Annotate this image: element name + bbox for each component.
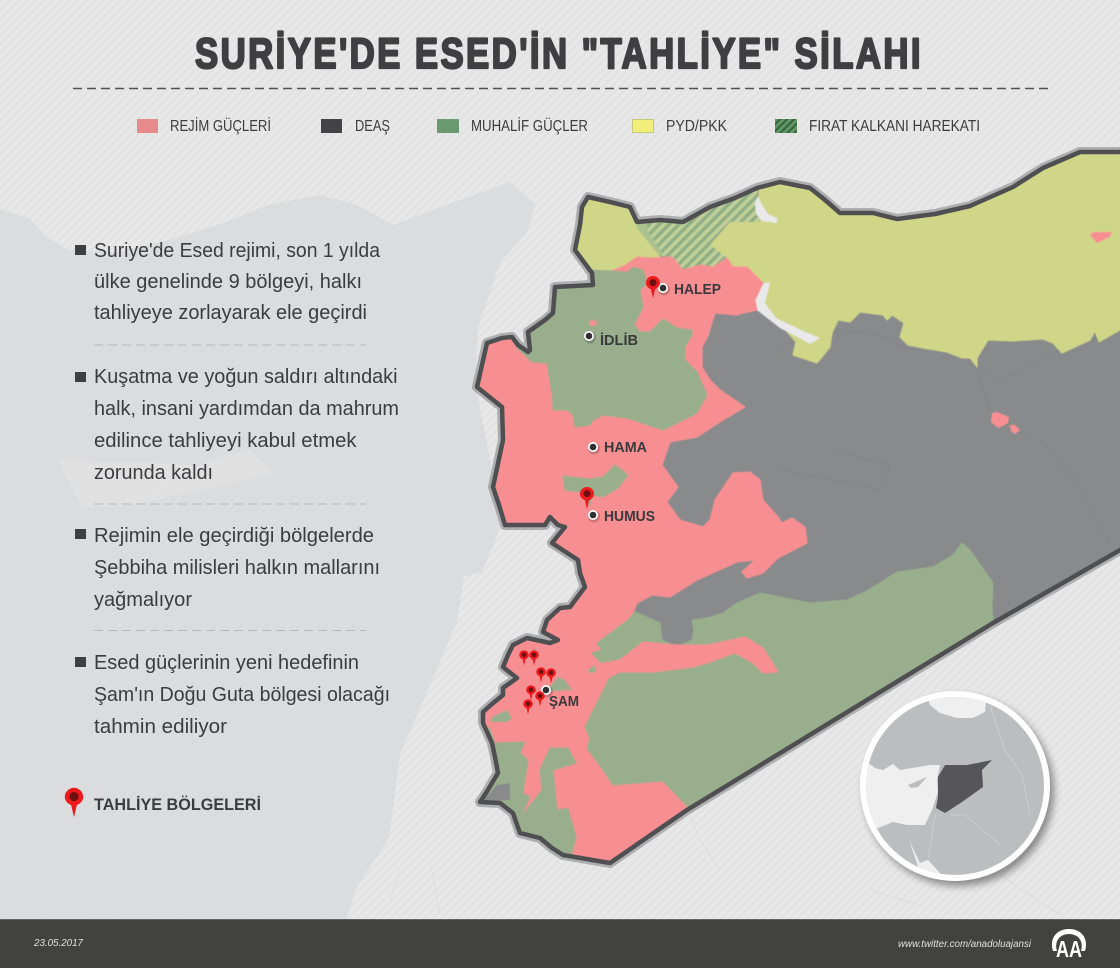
bullet point 2: zorunda kaldı: [94, 462, 213, 484]
inset: Cyprus: [908, 777, 927, 788]
pin legend: tahliye bölgeleri: TAHLİYE BÖLGELERİ: [94, 795, 261, 814]
source url: www.twitter.com/anadoluajansi: [898, 938, 1032, 950]
border outline: [477, 152, 1120, 863]
inset: Black Sea: [928, 697, 986, 718]
bullet point 1: [75, 240, 381, 324]
evacuation pins: [519, 276, 660, 715]
territory: muhalif İdlib: [500, 267, 707, 430]
bullet point 4: Şam'ın Doğu Guta bölgesi olacağı: [94, 684, 390, 706]
icon: AA logo: AA: [1056, 936, 1082, 962]
legend item: muhalif güçler: [437, 116, 588, 135]
bullet point 1: tahliyeye zorlayarak ele geçirdi: [94, 302, 367, 324]
background map silhouette: [0, 182, 1060, 920]
city: İdlib: İDLİB: [600, 332, 638, 349]
bullet point 2: [75, 366, 399, 484]
legend: [137, 116, 980, 135]
icon: AA logo: [1052, 929, 1086, 962]
territory: DEAŞ: [634, 190, 1120, 645]
bullet point 4: tahmin ediliyor: [94, 716, 227, 738]
bullet point 3: Şebbiha milisleri halkın mallarını: [94, 557, 380, 579]
territory: Fırat Kalkanı: [646, 190, 760, 270]
footer bar: [0, 919, 1120, 968]
inset: Red Sea: [909, 840, 940, 874]
legend item: PYD/PKK: PYD/PKK: [666, 118, 727, 135]
legend item: DEAŞ: [321, 118, 390, 135]
legend item: rejim güçleri: [137, 116, 271, 135]
date: 23.05.2017: [33, 937, 84, 949]
legend item: rejim güçleri: REJİM GÜÇLERİ: [170, 116, 271, 135]
territory: muhalif south: [585, 543, 1000, 830]
map of Syria: [470, 140, 1120, 880]
territory: muhalif Humus: [563, 465, 628, 505]
territory: rejim strip: [590, 637, 778, 678]
city: Humus: HUMUS: [604, 509, 655, 525]
bullet point 4: [75, 652, 390, 738]
legend item: fırat kalkanı harekatı: FIRAT KALKANI HAREKATI: [809, 118, 980, 135]
locator inset map: [850, 690, 1054, 886]
territory: rejim main: [470, 257, 807, 880]
legend item: PYD/PKK: [632, 118, 727, 135]
city: Şam: ŞAM: [549, 694, 579, 710]
bullet point 1: ülke genelinde 9 bölgeyi, halkı: [94, 271, 362, 293]
bullet point 2: edilince tahliyeyi kabul etmek: [94, 430, 358, 452]
city: Hama: HAMA: [604, 440, 648, 456]
city: Şam: [541, 685, 579, 710]
pin legend: tahliye bölgeleri: [65, 788, 261, 817]
inset: Syria: [936, 760, 992, 813]
title: SURİYE'DE ESED'İN "TAHLİYE" SİLAHI: [195, 30, 923, 78]
bullet point 3: [75, 525, 380, 611]
city: Halep: HALEP: [674, 282, 721, 298]
bullet point 2: halk, insani yardımdan da mahrum: [94, 398, 399, 420]
bullet text list: [75, 240, 399, 738]
territory: muhalif southwest: [486, 741, 577, 854]
territory: Afrin: [578, 200, 661, 271]
bullet point 3: yağmalıyor: [94, 589, 192, 611]
bullet point 1: Suriye'de Esed rejimi, son 1 yılda: [94, 240, 381, 262]
legend item: muhalif güçler: MUHALİF GÜÇLER: [471, 116, 588, 135]
bullet point 3: Rejimin ele geçirdiği bölgelerde: [94, 525, 374, 547]
bullet point 4: Esed güçlerinin yeni hedefinin: [94, 652, 359, 674]
territory: Golan: [484, 783, 510, 801]
territory: PYD/PKK east: [710, 140, 1120, 367]
isolated rejim pockets: [1090, 232, 1112, 243]
inset: Mediterranean: [866, 764, 940, 828]
legend item: DEAŞ: DEAŞ: [355, 118, 390, 135]
city: İdlib: [584, 331, 638, 349]
bullet point 2: Kuşatma ve yoğun saldırı altındaki: [94, 366, 398, 388]
gaps: [755, 196, 777, 223]
